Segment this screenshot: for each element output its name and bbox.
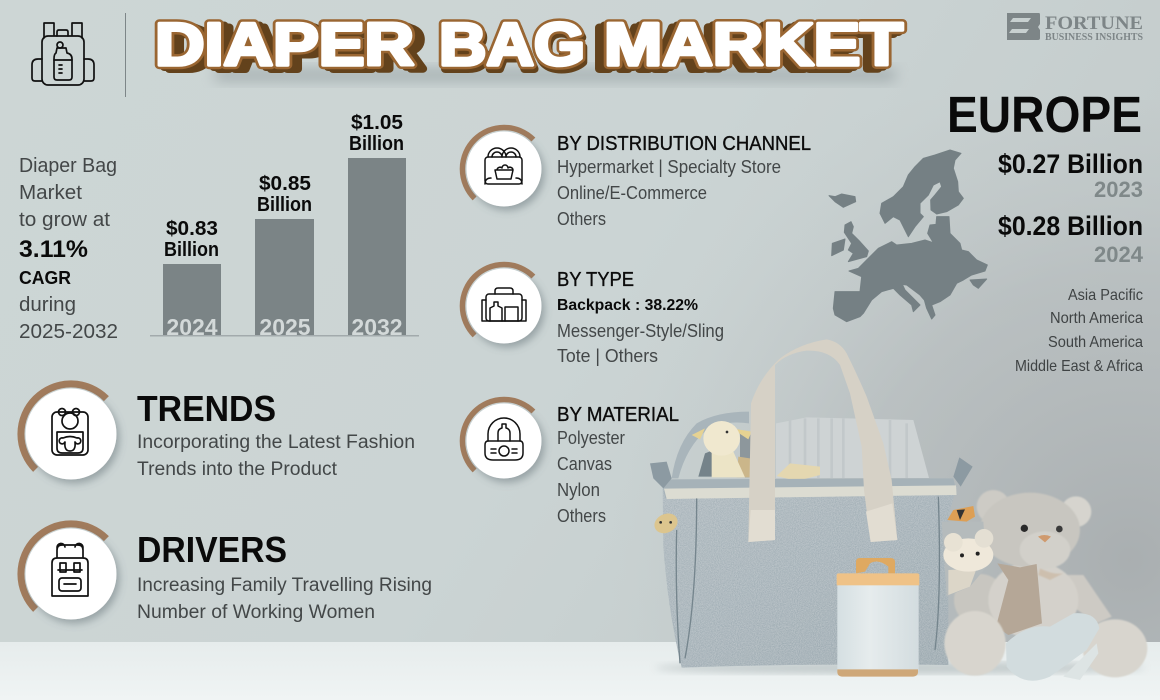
map: Europe — [829, 150, 987, 322]
panel: by material — [462, 399, 679, 526]
title: DIAPER — [155, 11, 414, 78]
text: CAGR summary: during — [19, 294, 76, 316]
header divider — [125, 13, 126, 97]
bar 2024: $0.83 — [166, 218, 218, 240]
bar 2032: $1.05 — [351, 112, 403, 134]
bar 2032: 2032 — [351, 314, 403, 340]
panel: by material: Nylon — [557, 480, 600, 500]
bar 2025: $0.85 — [259, 173, 311, 195]
logo: Fortune Business Insights: FORTUNE — [1045, 13, 1143, 34]
blanket — [776, 417, 929, 478]
list: other regions: Asia Pacific — [1068, 287, 1143, 304]
panel: drivers: Increasing Family Travelling Rising — [137, 575, 432, 596]
panel: trends: Trends into the Product — [137, 459, 338, 480]
panel: by type: Messenger-Style/Sling — [557, 321, 724, 341]
logo: Fortune Business Insights: BUSINESS INSIGHTS — [1045, 32, 1143, 43]
keychain toy — [942, 506, 993, 597]
icon: backpack with baby bottle — [32, 23, 94, 85]
panel: drivers: Number of Working Women — [137, 602, 375, 623]
text: CAGR summary: Market — [19, 182, 82, 204]
plush sheep — [692, 421, 820, 481]
panel: by type — [462, 264, 724, 366]
panel: Europe values: 2024 — [1094, 242, 1144, 267]
text: CAGR summary: Diaper Bag — [19, 155, 117, 177]
bag contents — [672, 412, 929, 481]
table surface — [0, 642, 1160, 700]
wall shading — [560, 100, 1160, 643]
text: CAGR summary: 3.11% — [19, 236, 88, 263]
bar chart — [150, 112, 419, 340]
text: CAGR summary: CAGR — [19, 268, 71, 288]
bag body — [663, 487, 957, 668]
panel: drivers: DRIVERS — [137, 529, 287, 570]
panel: drivers — [21, 524, 432, 623]
title: DIAPER — [165, 15, 424, 82]
panel: by type: Tote | Others — [557, 346, 658, 366]
side toy — [651, 510, 681, 537]
list: other regions: South America — [1048, 334, 1143, 351]
teddy bear — [942, 490, 1147, 681]
bar 2025: 2025 — [259, 314, 311, 340]
bar 2025 — [255, 173, 314, 340]
panel: by material: Polyester — [557, 428, 625, 448]
title shadow — [215, 70, 895, 80]
title: BAG — [439, 11, 585, 78]
bag handle — [748, 339, 897, 542]
panel: by type: Backpack : 38.22% — [557, 297, 698, 314]
icon: bib — [21, 384, 117, 480]
title: DIAPER — [155, 11, 414, 78]
title: MARKET — [604, 11, 903, 78]
icon: backpack — [21, 524, 116, 620]
text: CAGR summary: to grow at — [19, 209, 110, 231]
panel: Europe values: $0.28 Billion — [998, 211, 1143, 241]
list: other regions: North America — [1050, 310, 1143, 327]
panel: by material: BY MATERIAL — [557, 404, 679, 426]
panel: by distribution channel: Others — [557, 209, 606, 229]
panel: Europe values: EUROPE — [947, 86, 1142, 143]
title: DIAPER — [160, 13, 419, 80]
icon: stroller bag — [462, 127, 542, 206]
logo: Fortune Business Insights — [1007, 13, 1143, 43]
title: MARKET — [595, 15, 894, 82]
bag seams — [676, 497, 939, 663]
panel: by distribution channel: BY DISTRIBUTION CHANNEL — [557, 133, 811, 155]
bar 2024: Billion — [164, 239, 219, 261]
bag back flap — [672, 412, 749, 478]
inner lining — [698, 450, 713, 477]
panel: by distribution channel — [462, 127, 811, 229]
panel: by distribution channel: Online/E-Commerce — [557, 183, 707, 203]
bar 2025: Billion — [257, 194, 312, 216]
text: CAGR summary — [19, 155, 118, 343]
panel: trends — [21, 384, 415, 480]
list: other regions — [1015, 287, 1143, 375]
booties — [1006, 613, 1099, 681]
bar 2024 — [163, 218, 221, 340]
bar 2024: 2024 — [166, 314, 218, 340]
panel: by material: Others — [557, 506, 606, 526]
panel: by distribution channel: Hypermarket | Specialty Store — [557, 157, 781, 177]
text: CAGR summary: 2025-2032 — [19, 321, 118, 343]
bar 2032: Billion — [349, 133, 404, 155]
panel: by type: BY TYPE — [557, 269, 634, 291]
title — [155, 11, 903, 82]
title: BAG — [439, 11, 585, 78]
illustration: diaper bag, jar and teddy bear — [650, 339, 1147, 681]
title: MARKET — [604, 11, 903, 78]
bag top trim — [650, 457, 973, 499]
icon: bottle warmer — [462, 399, 542, 478]
title: MARKET — [600, 13, 899, 80]
bar 2032 — [348, 112, 406, 340]
table shadow — [655, 662, 1145, 674]
panel: trends: Incorporating the Latest Fashion — [137, 432, 415, 453]
panel: Europe values: $0.27 Billion — [998, 149, 1143, 179]
jar — [837, 558, 919, 677]
list: other regions: Middle East & Africa — [1015, 358, 1143, 375]
panel: Europe values — [947, 86, 1144, 267]
title: BAG — [441, 15, 587, 82]
panel: trends: TRENDS — [137, 388, 276, 429]
panel: by material: Canvas — [557, 454, 612, 474]
panel: Europe values: 2023 — [1094, 177, 1143, 202]
icon: duffel bag — [462, 264, 542, 344]
